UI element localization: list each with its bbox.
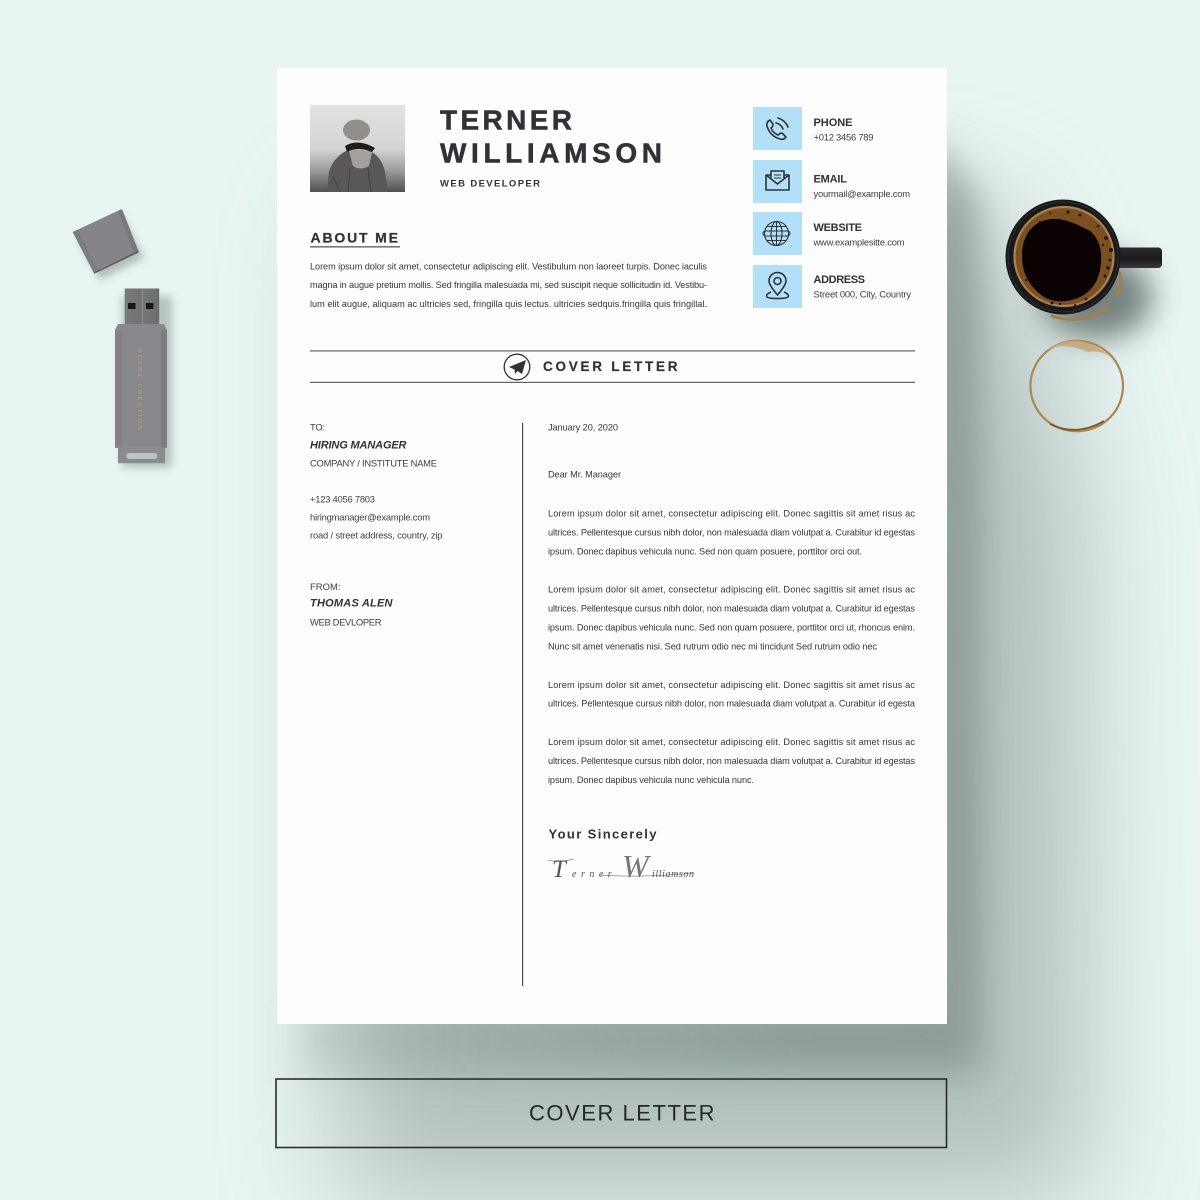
sign-off: Your Sincerely xyxy=(548,827,657,842)
signature: erner xyxy=(572,869,623,880)
contact: email xyxy=(753,160,910,203)
contact: website: www.examplesitte.com xyxy=(812,236,905,248)
icon: map pin xyxy=(766,272,788,298)
contact: phone: PHONE xyxy=(814,117,852,129)
paragraph 1: Lorem ipsum dolor sit amet, consectetur adipiscing elit. Donec sagittis sit amet risus ac xyxy=(548,508,915,518)
icon: phone xyxy=(767,118,788,139)
icon: coffee mug and stains xyxy=(1006,200,1162,431)
name title xyxy=(440,104,662,169)
bottom caption box: COVER LETTER xyxy=(529,1101,714,1126)
paragraph 2 xyxy=(548,584,915,651)
paragraph 1 xyxy=(548,508,915,556)
paragraph 3: ultrices. Pellentesque cursus nibh dolor, non malesuada diam volutpat a. Curabitur id egesta xyxy=(548,698,916,708)
bottom caption box xyxy=(276,1079,946,1148)
paragraph 1: ipsum. Donec dapibus vehicula nunc. Sed non quam posuere, porttitor orci out. xyxy=(548,546,862,556)
profile photo xyxy=(310,105,405,192)
paragraph 1: ultrices. Pellentesque cursus nibh dolor, non malesuada diam volutpat a. Curabitur id egestas xyxy=(548,527,915,537)
paragraph 4 xyxy=(548,737,915,785)
contact: phone: +012 3456 789 xyxy=(814,132,874,142)
contact: address: ADDRESS xyxy=(814,274,865,286)
paragraph 2: Lorem ipsum dolor sit amet, consectetur adipiscing elit. Donec sagittis sit amet risus ac xyxy=(548,584,915,594)
contact: email: EMAIL xyxy=(814,174,847,186)
letter body xyxy=(548,423,916,785)
coffee foam xyxy=(1014,206,1114,307)
recipient details: +123 4056 7803 xyxy=(310,494,375,504)
old coffee ring stain xyxy=(1030,341,1123,431)
contact: email: yourmail@example.com xyxy=(814,188,910,199)
recipient details: hiringmanager@example.com xyxy=(310,512,430,522)
recipient details xyxy=(310,422,442,540)
coffee liquid xyxy=(1022,219,1101,301)
column divider xyxy=(522,423,523,986)
about me text xyxy=(310,262,707,309)
about me text: lum elit augue, aliquam ac ultricies sed, fringilla quis lectus. ultricies sedquis.fringilla quis fringillal. xyxy=(310,299,707,309)
letter body: Dear Mr. Manager xyxy=(548,470,621,480)
contact: website xyxy=(753,212,905,255)
paragraph 2: Nunc sit amet venenatis nisi. Sed rutrum odio nec mi tincidunt Sed rutrum odio nec xyxy=(548,641,877,651)
contact: phone xyxy=(753,107,874,150)
recipient details: HIRING MANAGER xyxy=(310,440,407,452)
paragraph 2: ultrices. Pellentesque cursus nibh dolor, non malesuada diam volutpat a. Curabitur id egestas xyxy=(548,603,915,613)
usb body xyxy=(115,324,167,463)
signature: T xyxy=(552,856,568,883)
usb shadow xyxy=(122,296,172,468)
about me heading: ABOUT ME xyxy=(310,230,398,246)
band heading: COVER LETTER xyxy=(543,359,678,374)
sender details: THOMAS ALEN xyxy=(310,598,394,610)
recipient details: COMPANY / INSTITUTE NAME xyxy=(310,458,437,469)
usb gold label: SCENE CREATION xyxy=(136,349,143,430)
about me section xyxy=(310,230,707,309)
paragraph 4: Lorem ipsum dolor sit amet, consectetur adipiscing elit. Donec sagittis sit amet risus ac xyxy=(548,737,915,747)
cover letter band xyxy=(310,350,915,383)
about me text: Lorem ipsum dolor sit amet, consectetur adipiscing elit. Vestibulum non laoreet turpis. Donec iaculis xyxy=(310,262,707,272)
usb cap xyxy=(73,209,144,280)
stain under mug xyxy=(1052,273,1121,319)
contact: address: Street 000, City, Country xyxy=(814,288,911,300)
icon: paper plane xyxy=(504,354,530,380)
sender details xyxy=(310,581,394,628)
name title: TERNER xyxy=(440,104,572,136)
icon: globe xyxy=(763,222,790,246)
mug handle xyxy=(1112,248,1162,268)
icon: envelope xyxy=(766,171,789,190)
paragraph 4: ipsum. Donec dapibus vehicula nunc vehicula nunc. xyxy=(548,775,754,785)
sender details: FROM: xyxy=(310,581,340,592)
job title: WEB DEVELOPER xyxy=(440,178,540,190)
signature: illiamson xyxy=(652,869,695,880)
paragraph 3: Lorem ipsum dolor sit amet, consectetur adipiscing elit. Donec sagittis sit amet risus ac xyxy=(548,680,915,690)
recipient details: TO: xyxy=(310,422,325,433)
signature xyxy=(548,848,695,884)
usb connector xyxy=(125,288,159,324)
recipient details: road / street address, country, zip xyxy=(310,530,442,540)
paragraph 4: ultrices. Pellentesque cursus nibh dolor, non malesuada diam volutpat a. Curabitur id egestas xyxy=(548,756,915,766)
signature: W xyxy=(622,848,652,884)
contact: website: WEBSITE xyxy=(814,222,862,234)
mug body xyxy=(1006,200,1120,314)
paragraph 2: ipsum. Donec dapibus vehicula nunc. Sed non quam posuere, porttitor orci ut, rhoncus enim. xyxy=(548,622,915,632)
about me text: magna in augue pretium mollis. Sed fringilla malesuada mi, sed suscipit neque sollicitudin id. Vestibu- xyxy=(310,280,707,290)
icon: usb drive xyxy=(73,209,172,468)
document page xyxy=(277,68,947,1024)
letter body: January 20, 2020 xyxy=(548,423,618,433)
contact: address xyxy=(753,265,911,308)
mug shadow xyxy=(1041,255,1153,339)
paragraph 3 xyxy=(548,680,916,708)
name title: WILLIAMSON xyxy=(440,138,662,169)
sender details: WEB DEVLOPER xyxy=(310,616,382,628)
